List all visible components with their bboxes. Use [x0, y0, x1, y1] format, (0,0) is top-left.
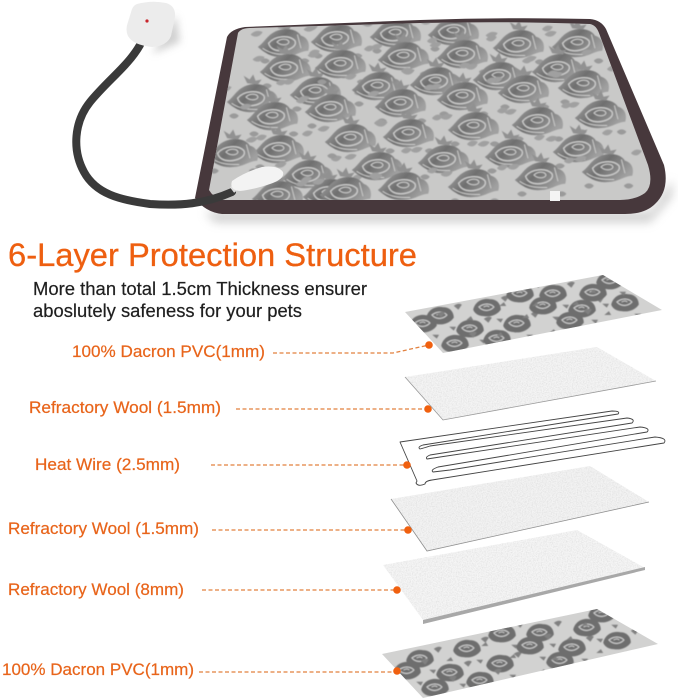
layer 3: heat wire — [400, 411, 665, 485]
callout: Heat Wire — [35, 456, 411, 474]
layer 2: refractory wool 1.5mm — [405, 347, 656, 420]
callout: 100% Dacron PVC bottom: 100% Dacron PVC(1mm) — [2, 661, 194, 679]
callout: 100% Dacron PVC bottom — [2, 661, 401, 679]
callout: Refractory Wool 8mm: Refractory Wool (8mm) — [8, 581, 184, 599]
controller shadow — [152, 15, 180, 54]
callout: Refractory Wool 1.5mm upper — [29, 399, 432, 417]
callout: Refractory Wool 1.5mm lower: Refractory Wool (1.5mm) — [8, 520, 199, 538]
product photo: heated pet mat — [76, 2, 672, 222]
mat surface with rose pattern — [209, 22, 650, 201]
callout: Refractory Wool 1.5mm lower — [8, 520, 412, 538]
callout: 100% Dacron PVC top — [72, 341, 433, 361]
intro text — [33, 279, 367, 321]
title: 6-Layer Protection Structure — [8, 237, 417, 273]
callout: Refractory Wool 8mm — [8, 581, 401, 599]
layer 1: floral dacron — [405, 275, 662, 353]
intro text: aboslutely safeness for your pets — [33, 301, 302, 321]
callout: Refractory Wool 1.5mm upper: Refractory Wool (1.5mm) — [29, 399, 221, 417]
layer 6: floral dacron — [382, 602, 658, 700]
layer 5: refractory wool 8mm — [383, 530, 645, 624]
controller box with red indicator — [126, 2, 175, 47]
callout: 100% Dacron PVC top: 100% Dacron PVC(1mm) — [72, 343, 265, 361]
intro text: More than total 1.5cm Thickness ensurer — [33, 279, 367, 299]
plug at mat — [231, 167, 283, 191]
mat border binding — [195, 18, 666, 214]
callout: Heat Wire: Heat Wire (2.5mm) — [35, 456, 180, 474]
power cable — [76, 45, 232, 205]
layer 4: refractory wool 1.5mm — [391, 466, 649, 551]
